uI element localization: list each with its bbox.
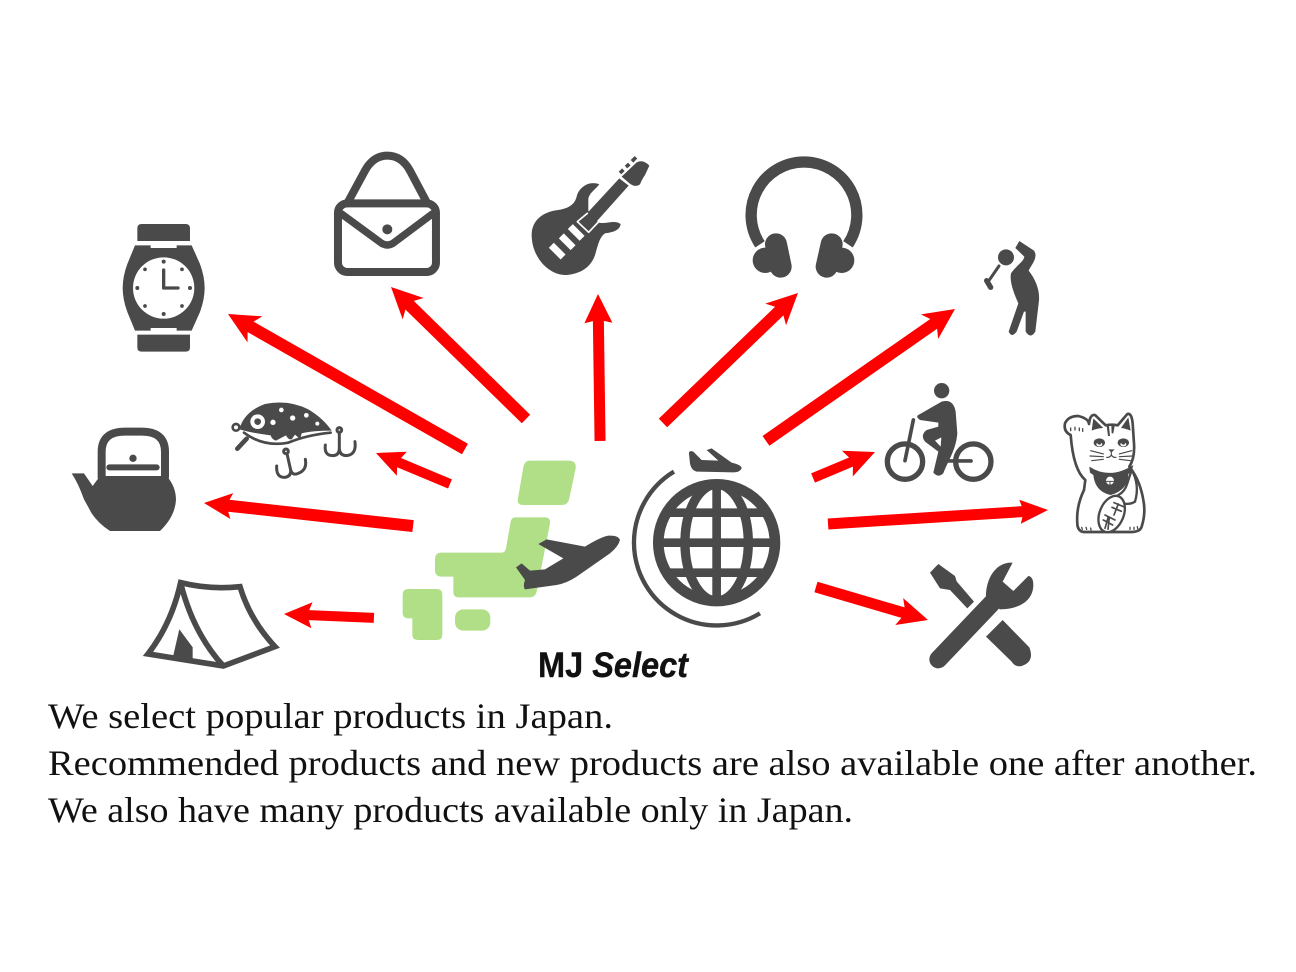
arrow: to tent [283, 601, 374, 631]
arrow: to lucky cat [827, 498, 1049, 536]
icon: cyclist [887, 383, 991, 479]
icon: airplane leaving Japan [516, 536, 620, 589]
icon: handbag [338, 156, 436, 272]
icon: electric guitar [532, 157, 649, 275]
arrow: to guitar [584, 294, 614, 441]
icon: wrench and screwdriver [930, 563, 1033, 666]
icon: tent [148, 583, 275, 666]
arrow: to tools [812, 574, 932, 633]
icon: fishing lure [233, 403, 355, 477]
arrow: to headphones [653, 282, 808, 434]
arrow: to bicycle [808, 439, 880, 491]
description text [48, 696, 1257, 830]
icon: golfer [987, 241, 1039, 335]
map of Japan [403, 461, 576, 640]
description text: We select popular products in Japan. [48, 696, 613, 736]
description text: We also have many products available only in Japan. [48, 790, 853, 830]
icon: headphones [751, 162, 857, 273]
arrow: to fishing lure [371, 441, 455, 496]
arrow: to handbag [381, 276, 536, 430]
icon: wristwatch [123, 224, 205, 352]
arrow: to golfer [757, 297, 964, 453]
icon: iron teapot [72, 432, 176, 531]
icon: lucky cat [1065, 414, 1144, 536]
icon: globe with airplane [634, 448, 775, 625]
description text: Recommended products and new products are also available one after another. [48, 743, 1257, 783]
arrow: to watch [221, 301, 472, 462]
brand name: MJ Select [538, 646, 689, 685]
arrow: to teapot [203, 490, 414, 539]
